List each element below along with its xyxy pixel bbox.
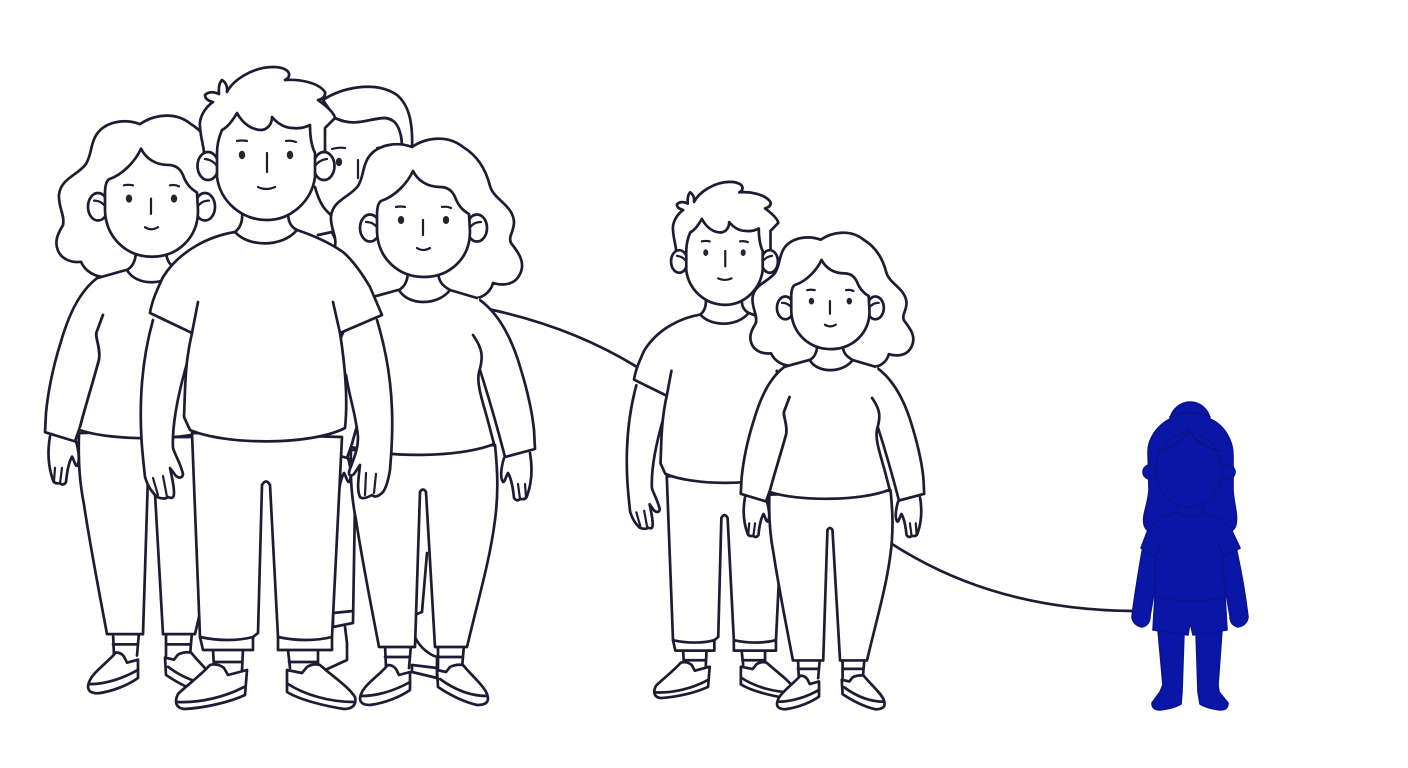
child: arms — [1132, 535, 1248, 627]
couple: woman — [741, 233, 924, 709]
front man — [141, 67, 392, 709]
right woman — [317, 139, 535, 705]
couple: man — [627, 182, 823, 698]
couple — [627, 182, 924, 709]
group of four adults — [45, 67, 535, 709]
child: shorts — [1153, 596, 1227, 635]
child: legs and shoes — [1152, 630, 1228, 710]
connector line: group to couple — [488, 309, 637, 367]
left woman — [45, 116, 263, 693]
child: shirt — [1141, 512, 1240, 601]
back figure — [315, 87, 437, 678]
blue child figure — [1132, 402, 1248, 710]
child: hair and bun — [1144, 402, 1237, 533]
child: head and features — [1143, 412, 1235, 557]
connector line: couple to child — [892, 544, 1133, 611]
